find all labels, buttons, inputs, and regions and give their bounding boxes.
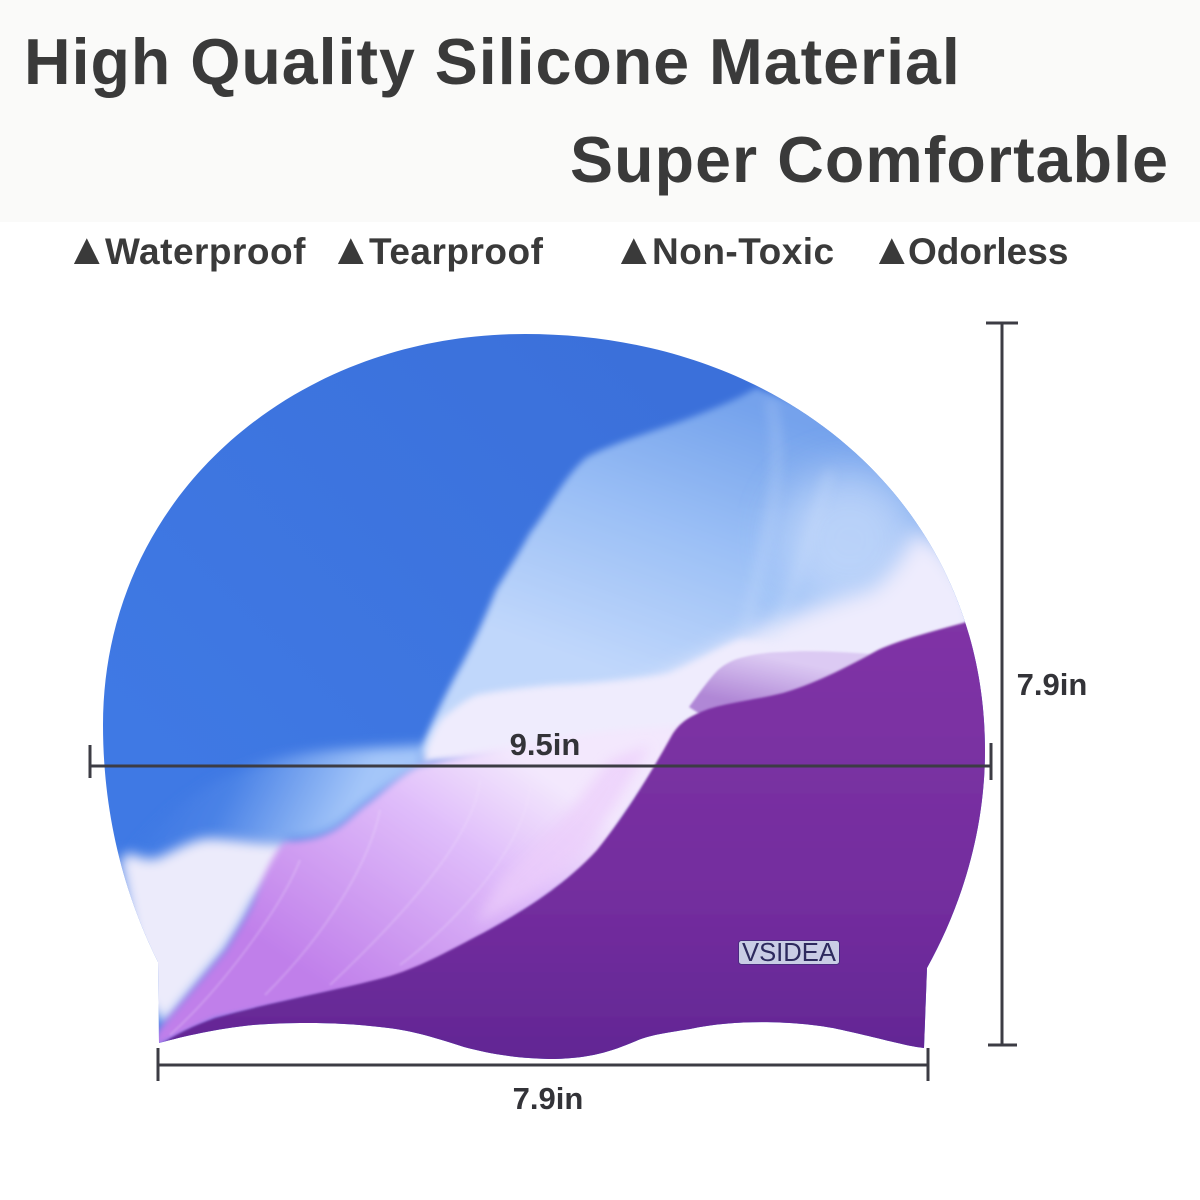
label: 9.5in: 9.5in [510,727,580,762]
lilac streaks [170,834,468,1036]
feature: non-toxic: ▲ [612,225,656,274]
blue base [90,320,1000,1070]
swim cap illustration [88,322,1086,1110]
label: height 7.9in: 7.9in [1017,667,1087,702]
feature: tearproof: Tearproof [369,231,543,272]
left streaked band [184,738,429,844]
feature: non-toxic [612,225,835,274]
feature: waterproof: Waterproof [105,231,306,272]
feature: tearproof [329,225,543,274]
feature: waterproof [65,225,306,274]
light blue band [418,388,1000,760]
white band centre [420,638,752,764]
white area upper right [655,524,972,676]
header band [0,0,1200,222]
dimension: height 7.9in [986,323,1018,1045]
dimension: bottom 7.9in [158,1048,928,1081]
feature: non-toxic: Non-Toxic [652,231,835,272]
title: high quality silicone material: High Quality Silicone Material [24,26,961,98]
subtitle: super comfortable: Super Comfortable [570,124,1169,196]
feature: tearproof: ▲ [329,225,373,274]
cap body [90,320,1010,1080]
pale glow along purple edge [482,750,644,918]
lilac region [150,725,685,1050]
dimension: width 9.5in [90,743,991,780]
label: bottom 7.9in: 7.9in [513,1081,583,1116]
left white region [120,838,295,1025]
feature: odorless [870,225,1068,274]
feature: waterproof: ▲ [65,225,109,274]
feature: odorless: ▲ [870,225,914,274]
feature: odorless: Odorless [908,231,1068,272]
purple region [162,620,985,1059]
light blue streaks [764,401,783,541]
brand label: VSIDEA [742,937,837,967]
pale glow upper right [780,470,920,610]
lilac patch [689,651,870,718]
